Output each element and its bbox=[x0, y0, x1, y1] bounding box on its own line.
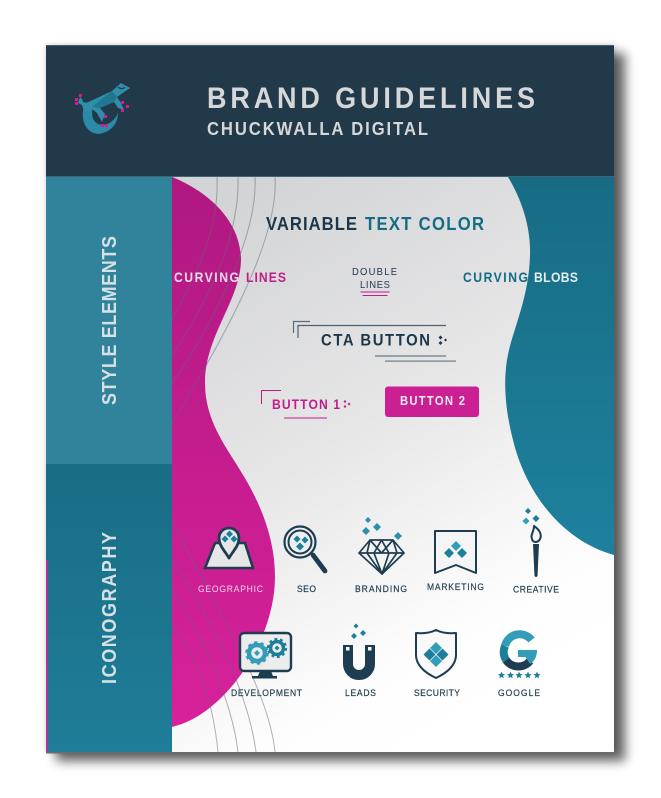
icon group: leads bbox=[345, 624, 376, 698]
heading: variable text color: TEXT COLOR bbox=[365, 213, 484, 234]
icon: magnet diamonds bbox=[351, 624, 366, 639]
label: CREATIVE bbox=[513, 584, 559, 595]
icon: map with pin bbox=[205, 528, 253, 568]
page background bbox=[46, 45, 614, 753]
heading: variable text color: VARIABLE bbox=[266, 213, 357, 234]
button 1: BUTTON 1 bbox=[272, 396, 340, 412]
icon: paintbrush bbox=[531, 526, 541, 577]
curving lines bbox=[172, 177, 275, 752]
icon group: marketing bbox=[427, 531, 484, 592]
icon group: geographic bbox=[198, 528, 263, 594]
icon: paint diamonds bbox=[525, 508, 540, 522]
button 2: BUTTON 2 bbox=[400, 393, 465, 408]
sample: curving blobs: CURVING bbox=[463, 269, 528, 285]
icon: monitor with gears bbox=[240, 633, 291, 678]
button 2 bbox=[385, 386, 479, 417]
panel: iconography sidebar bbox=[46, 464, 172, 752]
CTA button bbox=[294, 322, 456, 362]
sample: double lines: LINES bbox=[360, 280, 390, 291]
subtitle: CHUCKWALLA DIGITAL bbox=[207, 118, 428, 139]
label: GEOGRAPHIC bbox=[198, 584, 263, 594]
icon: five stars bbox=[498, 672, 541, 678]
label: GOOGLE bbox=[498, 688, 540, 698]
icon: lower diamonds bbox=[444, 548, 467, 558]
sidebar heading: iconography: ICONOGRAPHY bbox=[99, 532, 121, 684]
sample: curving blobs: BLOBS bbox=[534, 269, 578, 285]
CTA button: CTA BUTTON bbox=[321, 332, 430, 350]
label: SECURITY bbox=[414, 688, 460, 698]
icon: G logo bbox=[504, 634, 537, 667]
icon: magnifying glass bbox=[284, 526, 325, 571]
icon: diamond gem bbox=[359, 540, 404, 574]
page drop shadow bbox=[46, 45, 625, 761]
icon: banner bbox=[435, 531, 476, 573]
label: MARKETING bbox=[427, 582, 484, 592]
label: LEADS bbox=[345, 688, 376, 698]
sample: curving lines: CURVING bbox=[174, 269, 239, 285]
heading: variable text color bbox=[266, 213, 484, 234]
icon: magenta toe dots bbox=[75, 94, 129, 127]
icon: magnet bbox=[346, 645, 372, 675]
title: BRAND GUIDELINES bbox=[207, 82, 535, 115]
icon: light paint diamond bbox=[522, 518, 530, 524]
label: BRANDING bbox=[355, 584, 407, 594]
icon: shield dark diamonds bbox=[424, 648, 448, 660]
icon group: creative bbox=[513, 508, 559, 595]
sidebar heading: style elements: STYLE ELEMENTS bbox=[99, 236, 121, 405]
icon: chuckwalla lizard logo bbox=[75, 83, 130, 134]
icon: shield light diamonds bbox=[430, 642, 442, 667]
icon group: security bbox=[414, 630, 460, 698]
icon group: development bbox=[231, 633, 302, 698]
icon: banner diamonds bbox=[451, 541, 461, 551]
magenta curving blob bbox=[172, 177, 275, 727]
teal curving blob bbox=[505, 177, 614, 555]
icon group: branding bbox=[355, 517, 407, 594]
sample: curving lines bbox=[174, 269, 286, 285]
panel: content background bbox=[172, 177, 614, 752]
sample: curving blobs bbox=[463, 269, 578, 285]
sample: double lines bbox=[352, 267, 397, 296]
bottom page edge bbox=[46, 752, 614, 754]
icon group: google bbox=[498, 634, 541, 678]
icon group: seo bbox=[284, 526, 325, 594]
icon: shield bbox=[416, 630, 456, 678]
icon: sparkle diamonds bbox=[362, 517, 402, 540]
panel: header band bbox=[46, 45, 614, 177]
label: DEVELOPMENT bbox=[231, 688, 302, 698]
label: SEO bbox=[297, 584, 316, 594]
sample: double lines: DOUBLE bbox=[352, 267, 397, 278]
button 1 bbox=[262, 390, 350, 418]
panel: style elements sidebar bbox=[46, 177, 172, 464]
sample: curving lines: LINES bbox=[246, 269, 286, 285]
